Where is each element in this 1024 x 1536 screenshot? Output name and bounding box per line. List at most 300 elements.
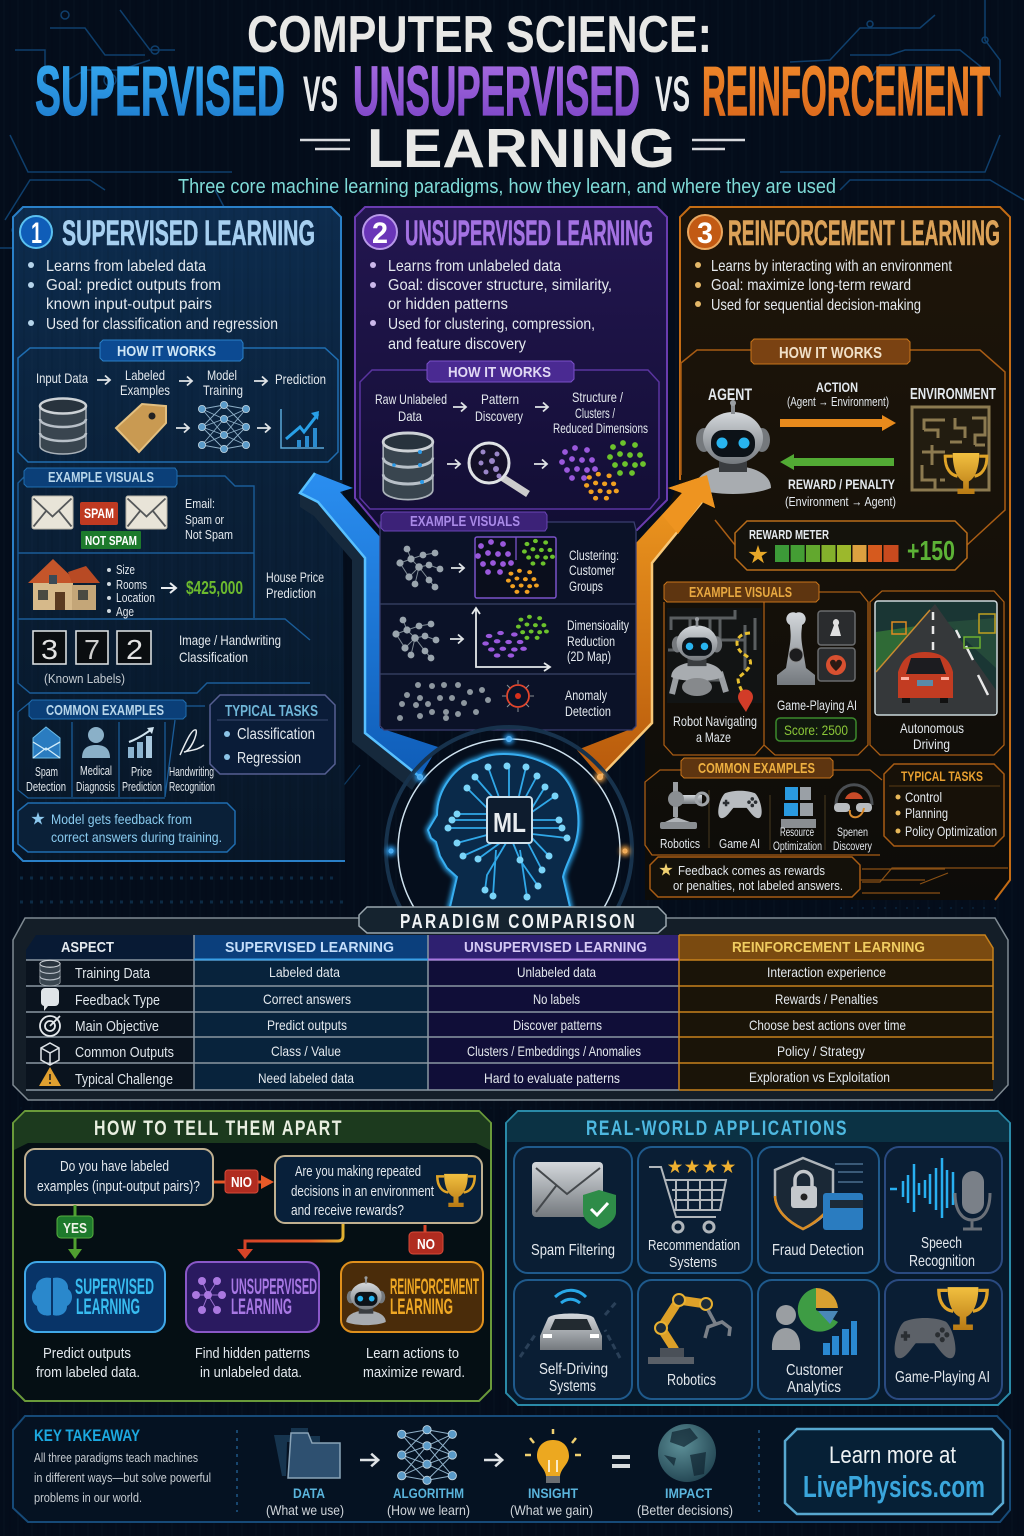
reward label: (Environment → Agent) <box>785 494 896 509</box>
house caption: Prediction <box>266 585 316 601</box>
bullets <box>695 258 952 314</box>
arrow: orange from ML to reinforcement <box>577 475 715 777</box>
question 2: and receive rewards? <box>291 1202 404 1219</box>
label: HOW IT WORKS <box>117 343 216 360</box>
column: supervised values <box>258 964 354 1086</box>
robot navigating a maze <box>667 608 762 745</box>
arrow <box>484 1454 502 1466</box>
column: supervised values: Correct answers <box>263 991 351 1007</box>
captions: in unlabeled data. <box>200 1364 302 1381</box>
icon: folder <box>274 1428 340 1478</box>
callout: learn more: Learn more at <box>829 1442 956 1469</box>
panel frame <box>355 207 667 530</box>
row: dimensionality reduction: Dimensioality <box>567 618 629 633</box>
icon: house <box>28 559 100 610</box>
typical tasks: supervised <box>210 695 335 774</box>
reward label: REWARD / PENALTY <box>788 476 896 492</box>
image caption <box>179 632 281 665</box>
arrow: reward <box>780 454 894 470</box>
row icons <box>39 960 61 1086</box>
typical tasks: reinforcement: Control <box>905 789 942 805</box>
example labels: Spam <box>35 765 58 779</box>
title line 2: VS <box>303 66 338 122</box>
captions <box>36 1345 465 1381</box>
card: fraud detection: Fraud Detection <box>772 1242 864 1259</box>
step labels: Reduced Dimensions <box>553 420 648 436</box>
callout: rewards feedback <box>650 857 860 897</box>
panel: reinforcement frame <box>645 207 1010 900</box>
typical tasks: supervised: TYPICAL TASKS <box>225 703 318 720</box>
action label <box>787 379 889 409</box>
house caption <box>266 569 324 601</box>
column: reinforcement values: Interaction experience <box>767 964 886 980</box>
icon: gamepad <box>718 791 762 818</box>
panel: real-world applications <box>506 1111 1010 1405</box>
example labels: Resource <box>780 827 814 839</box>
impact label <box>637 1485 733 1518</box>
label <box>664 582 819 602</box>
header labels: UNSUPERVISED LEARNING <box>464 939 647 956</box>
bullets: Goal: predict outputs from <box>46 277 221 294</box>
icon: brain <box>32 1278 72 1316</box>
header cells <box>26 935 993 1090</box>
typical tasks: reinforcement: Planning <box>905 805 948 821</box>
house features: Age <box>116 605 134 619</box>
column: unsupervised values: Discover patterns <box>513 1017 602 1033</box>
icon: resource blocks <box>781 787 816 828</box>
panel frame <box>13 1416 1010 1522</box>
example labels <box>660 827 872 853</box>
column: reinforcement values: Choose best actions over time <box>749 1017 906 1033</box>
algorithm label: (How we learn) <box>387 1502 470 1518</box>
row: aspect names <box>75 966 174 1088</box>
row: clustering <box>396 537 619 598</box>
comparison title <box>359 907 666 933</box>
question 2: decisions in an environment <box>291 1183 435 1200</box>
question 2: Are you making repeated <box>295 1163 421 1180</box>
question 1: Do you have labeled <box>60 1158 169 1175</box>
example labels: Price <box>131 765 152 779</box>
card: spam filtering: Spam Filtering <box>531 1242 615 1259</box>
house features: Size <box>116 563 135 577</box>
comparison table <box>26 935 993 1090</box>
icon: robot agent <box>695 400 771 494</box>
callout: feedback: correct answers during training. <box>51 829 222 845</box>
panel frame <box>506 1111 1010 1405</box>
number badge: 1 <box>31 217 42 250</box>
data label: DATA <box>293 1485 325 1501</box>
algorithm label <box>387 1485 470 1518</box>
digits with known labels: 2 <box>126 634 143 665</box>
captions: from labeled data. <box>36 1364 140 1381</box>
arrows <box>447 402 548 468</box>
icon: algorithm network <box>398 1426 456 1484</box>
impact label: (Better decisions) <box>637 1502 733 1518</box>
how it works: supervised <box>18 340 338 462</box>
typical tasks: reinforcement: TYPICAL TASKS <box>901 768 983 784</box>
arrows <box>97 376 270 432</box>
callout: feedback: Model gets feedback from <box>51 811 192 827</box>
typical tasks: reinforcement: Policy Optimization <box>905 823 997 839</box>
NO branch to unsupervised <box>245 1224 343 1250</box>
typical tasks: reinforcement <box>884 764 1004 846</box>
example labels: Handwriting <box>169 765 214 779</box>
house features: Rooms <box>116 578 147 592</box>
card: recommendation systems <box>638 1147 752 1273</box>
example labels: Robotics <box>660 837 700 851</box>
column: unsupervised values: No labels <box>533 991 580 1007</box>
agent label: AGENT <box>708 385 752 404</box>
icon: emails and spam tags <box>32 496 167 549</box>
callout: rewards feedback: or penalties, not labeled answers. <box>673 878 843 893</box>
arrow: blue from ML to supervised <box>300 473 438 790</box>
card: customer analytics: Analytics <box>787 1379 841 1396</box>
row: aspect names: Common Outputs <box>75 1045 174 1061</box>
bullets: and feature discovery <box>388 336 526 353</box>
example labels: Detection <box>26 780 66 794</box>
circuit background top <box>0 0 1024 290</box>
game playing AI: Score: 2500 <box>784 722 848 738</box>
circuit background lower <box>20 620 1000 1108</box>
typical tasks: supervised: Classification <box>237 726 315 743</box>
outcome: supervised <box>25 1262 165 1332</box>
row: clustering: Customer <box>569 563 615 578</box>
example labels: Diagnosis <box>76 780 115 794</box>
step labels: Structure / <box>572 389 623 405</box>
step labels: Raw Unlabeled <box>375 391 447 407</box>
column: unsupervised values <box>467 964 641 1086</box>
insight label: INSIGHT <box>528 1485 578 1501</box>
email caption <box>185 497 233 542</box>
bullets: Used for classification and regression <box>46 316 278 333</box>
label: HOW IT WORKS <box>448 364 551 381</box>
insight label: (What we gain) <box>510 1502 593 1518</box>
number badge <box>363 215 397 250</box>
question 2 <box>275 1156 482 1223</box>
captions: Find hidden patterns <box>195 1345 310 1362</box>
NO branch to question 2: NIO <box>231 1174 252 1191</box>
column: reinforcement values: Policy / Strategy <box>777 1043 865 1059</box>
example labels: Medical <box>80 764 112 778</box>
row: clustering: Groups <box>569 579 603 594</box>
icon: globe <box>658 1424 716 1482</box>
outcome: unsupervised: UNSUPERVISED <box>231 1274 317 1299</box>
icon: nodes <box>192 1277 226 1314</box>
column: unsupervised values: Unlabeled data <box>517 964 596 980</box>
column: reinforcement values: Rewards / Penalties <box>775 991 878 1007</box>
column: supervised values: Need labeled data <box>258 1070 354 1086</box>
callout: learn more <box>785 1429 1003 1514</box>
title line 2: VS <box>655 66 690 122</box>
column: reinforcement values: Exploration vs Exploitation <box>749 1069 890 1085</box>
row: aspect names: Feedback Type <box>75 993 160 1009</box>
step labels: Data <box>398 408 422 424</box>
bullets: Used for sequential decision-making <box>711 297 921 314</box>
example labels <box>26 764 215 794</box>
data label <box>266 1485 344 1518</box>
icon: database <box>40 398 86 454</box>
callout: rewards feedback: Feedback comes as rewards <box>678 863 825 878</box>
bullets: Learns by interacting with an environment <box>711 258 952 275</box>
icon: emails and spam tags: SPAM <box>84 505 114 521</box>
bullets: Goal: discover structure, similarity, <box>388 277 612 294</box>
house caption: House Price <box>266 569 324 585</box>
example visuals: reinforcement <box>664 582 1004 755</box>
heading: UNSUPERVISED LEARNING <box>405 214 653 253</box>
insight label <box>510 1485 593 1518</box>
how it works: unsupervised <box>360 361 659 509</box>
label <box>681 758 833 778</box>
label: EXAMPLE VISUALS <box>689 584 792 601</box>
row: dimensionality reduction <box>392 608 629 671</box>
column: supervised values: Class / Value <box>271 1043 341 1059</box>
email caption: Not Spam <box>185 528 233 542</box>
panel: how to tell them apart: REINFORCEMENT <box>390 1274 479 1299</box>
row: dimensionality reduction: Reduction <box>567 634 615 649</box>
panel: unsupervised learning <box>355 207 667 530</box>
icon: spam envelope <box>33 727 60 758</box>
card: self-driving systems: Systems <box>549 1378 596 1395</box>
title line 2: UNSUPERVISED <box>353 52 640 130</box>
label: EXAMPLE VISUALS <box>48 469 154 486</box>
bullets <box>28 258 278 333</box>
card: speech recognition: Recognition <box>909 1253 975 1270</box>
autonomous driving scene: Driving <box>913 736 950 752</box>
NO branch to reinforcement: NO <box>417 1236 435 1253</box>
typical tasks: supervised: Regression <box>237 750 301 767</box>
icon: handwriting <box>180 730 204 755</box>
step labels: Discovery <box>475 408 523 424</box>
title line 2: SUPERVISED <box>35 52 285 130</box>
step labels: Labeled <box>125 367 165 383</box>
icon: magnifier <box>469 443 528 494</box>
icon: ML brain head: ML <box>493 807 526 838</box>
icon: emails and spam tags: NOT SPAM <box>85 533 137 548</box>
example labels: Prediction <box>122 780 162 794</box>
title band <box>14 1112 490 1150</box>
arrowhead: orange over robot <box>662 475 715 534</box>
header labels: ASPECT <box>61 939 114 956</box>
bullets <box>370 258 612 353</box>
outcome: supervised: LEARNING <box>76 1294 140 1319</box>
label: HOW IT WORKS <box>779 345 882 362</box>
game playing AI: Game-Playing AI <box>777 697 857 713</box>
outcome: unsupervised: LEARNING <box>231 1294 292 1319</box>
title band: HOW TO TELL THEM APART <box>94 1117 343 1140</box>
number badge: 2 <box>372 217 388 250</box>
step labels: Input Data <box>36 370 88 386</box>
label <box>100 340 243 361</box>
house features: Location <box>116 591 155 605</box>
question 1: examples (input-output pairs)? <box>37 1178 200 1195</box>
card: self-driving systems <box>514 1280 632 1399</box>
title band: REAL-WORLD APPLICATIONS <box>586 1117 848 1140</box>
card: self-driving systems: Self-Driving <box>539 1361 608 1378</box>
bullets: Learns from labeled data <box>46 258 206 275</box>
clusters <box>559 440 646 501</box>
outcome: reinforcement: LEARNING <box>390 1294 453 1319</box>
how it works: reinforcement <box>662 339 1005 545</box>
title line 3 <box>300 117 745 179</box>
column: supervised values: Predict outputs <box>267 1017 347 1033</box>
title line 1: COMPUTER SCIENCE: <box>247 6 712 64</box>
panel: paradigm comparison <box>13 907 1008 1100</box>
digits with known labels <box>33 631 151 686</box>
panel: supervised learning <box>13 207 345 861</box>
header labels: SUPERVISED LEARNING <box>225 939 394 956</box>
icon: headset <box>834 785 872 817</box>
house features <box>107 563 155 619</box>
card: game-playing AI <box>885 1280 1002 1399</box>
icon: database with lights <box>383 433 433 500</box>
robot navigating a maze: Robot Navigating <box>673 713 757 729</box>
row: anomaly detection: Detection <box>565 704 611 719</box>
icon: tag <box>116 404 166 452</box>
card: customer analytics <box>758 1280 879 1399</box>
header labels: REINFORCEMENT LEARNING <box>732 939 925 956</box>
bullets: or hidden patterns <box>388 296 508 313</box>
card: robotics: Robotics <box>667 1372 716 1389</box>
card: recommendation systems: Systems <box>669 1254 717 1271</box>
image caption: Classification <box>179 649 248 665</box>
common examples: reinforcement <box>645 758 882 855</box>
label: COMMON EXAMPLES <box>46 702 164 719</box>
grid <box>26 935 679 1090</box>
bullets: known input-output pairs <box>46 296 212 313</box>
digits with known labels: 3 <box>41 634 58 665</box>
column: unsupervised values: Hard to evaluate patterns <box>484 1070 620 1086</box>
card: recommendation systems: Recommendation <box>648 1237 740 1254</box>
robot navigating a maze: a Maze <box>696 729 731 745</box>
circuit traces right bottom <box>860 868 1008 893</box>
heading: SUPERVISED LEARNING <box>62 214 315 253</box>
card: robotics <box>638 1280 752 1399</box>
reward meter: +150 <box>907 535 955 566</box>
example labels: Discovery <box>833 841 872 853</box>
reward meter: REWARD METER <box>749 527 829 542</box>
row: anomaly detection <box>397 680 611 721</box>
key takeaway text <box>34 1426 211 1505</box>
reward meter <box>735 521 967 570</box>
game playing AI <box>776 611 857 741</box>
panel: how to tell them apart <box>13 1111 491 1401</box>
row: anomaly detection: Anomaly <box>565 688 607 703</box>
email caption: Email: <box>185 497 215 511</box>
row: aspect names: Typical Challenge <box>75 1072 173 1088</box>
number badge: 3 <box>697 217 713 250</box>
header labels <box>61 939 925 956</box>
common examples: supervised <box>18 700 215 798</box>
label: COMMON EXAMPLES <box>698 760 815 777</box>
step labels: Pattern <box>481 391 519 407</box>
email caption: Spam or <box>185 513 224 527</box>
arrow: action <box>780 415 896 431</box>
callout: feedback <box>18 803 235 852</box>
table frame <box>13 918 1008 1100</box>
label: EXAMPLE VISUALS <box>410 513 520 530</box>
image caption: Image / Handwriting <box>179 632 281 648</box>
icon: rising chart <box>281 409 324 448</box>
key takeaway text: in different ways—but solve powerful <box>34 1471 211 1485</box>
panel: key takeaway footer <box>13 1416 1010 1522</box>
reward label <box>785 476 896 509</box>
icon: doctor <box>82 727 110 758</box>
label <box>427 361 574 382</box>
number badge <box>688 215 722 250</box>
NO branch to reinforcement <box>409 1225 443 1254</box>
card: fraud detection <box>758 1147 879 1273</box>
action label: (Agent → Environment) <box>787 395 889 409</box>
panel frame <box>13 207 345 861</box>
example visuals: supervised <box>18 468 324 693</box>
example labels: Game AI <box>719 837 760 851</box>
card: spam filtering <box>514 1147 632 1273</box>
YES branch: YES <box>63 1220 87 1237</box>
outcome: reinforcement <box>341 1262 483 1332</box>
key takeaway text: KEY TAKEAWAY <box>34 1426 141 1445</box>
NO branch to question 2 <box>214 1170 274 1193</box>
autonomous driving scene <box>875 601 997 752</box>
bullets: Learns from unlabeled data <box>388 258 561 275</box>
step labels: Clusters / <box>575 405 615 421</box>
subtitle: Three core machine learning paradigms, how they learn, and where they are used <box>178 176 836 198</box>
example labels: Spenen <box>837 827 868 839</box>
step labels <box>36 367 326 398</box>
panel: unsupervised example visuals <box>380 512 636 730</box>
card: speech recognition: Speech <box>921 1235 962 1252</box>
captions: maximize reward. <box>363 1364 465 1381</box>
bullets: Goal: maximize long-term reward <box>711 277 911 294</box>
icon: light bulb <box>525 1429 581 1483</box>
row: dimensionality reduction: (2D Map) <box>567 649 611 664</box>
digits with known labels: 7 <box>84 634 100 665</box>
data label: (What we use) <box>266 1502 344 1518</box>
YES branch <box>57 1205 93 1259</box>
column: reinforcement values <box>749 964 906 1085</box>
outcome: supervised: SUPERVISED <box>75 1274 154 1299</box>
label <box>751 339 910 364</box>
icon: maze with trophy <box>912 407 989 494</box>
autonomous driving scene: Autonomous <box>900 720 964 736</box>
outcome: unsupervised <box>186 1262 319 1332</box>
title band <box>507 1112 1009 1142</box>
example labels: Optimization <box>773 841 822 853</box>
step labels <box>375 389 648 436</box>
example labels: Recognition <box>169 780 215 794</box>
bullets: Used for clustering, compression, <box>388 316 595 333</box>
captions: Predict outputs <box>43 1345 131 1362</box>
card: speech recognition <box>885 1147 1002 1273</box>
step labels: Training <box>203 382 243 398</box>
icon: neural network <box>198 401 250 453</box>
title line 2 <box>35 52 990 130</box>
arrow <box>360 1454 378 1466</box>
title line 3: LEARNING <box>367 117 675 179</box>
column: unsupervised values: Clusters / Embeddings / Anomalies <box>467 1043 641 1059</box>
number badge <box>20 216 52 250</box>
icon: robotic arm <box>660 782 708 829</box>
row: clustering: Clustering: <box>569 548 619 563</box>
digits with known labels: (Known Labels) <box>44 672 125 686</box>
arrowhead <box>237 1249 253 1259</box>
icon: robot <box>346 1276 386 1325</box>
column: supervised values: Labeled data <box>269 964 340 980</box>
icon: price chart <box>128 727 154 758</box>
captions: Learn actions to <box>366 1345 459 1362</box>
comparison title: PARADIGM COMPARISON <box>400 911 637 933</box>
row: aspect names: Main Objective <box>75 1019 159 1035</box>
step labels: Examples <box>120 382 170 398</box>
